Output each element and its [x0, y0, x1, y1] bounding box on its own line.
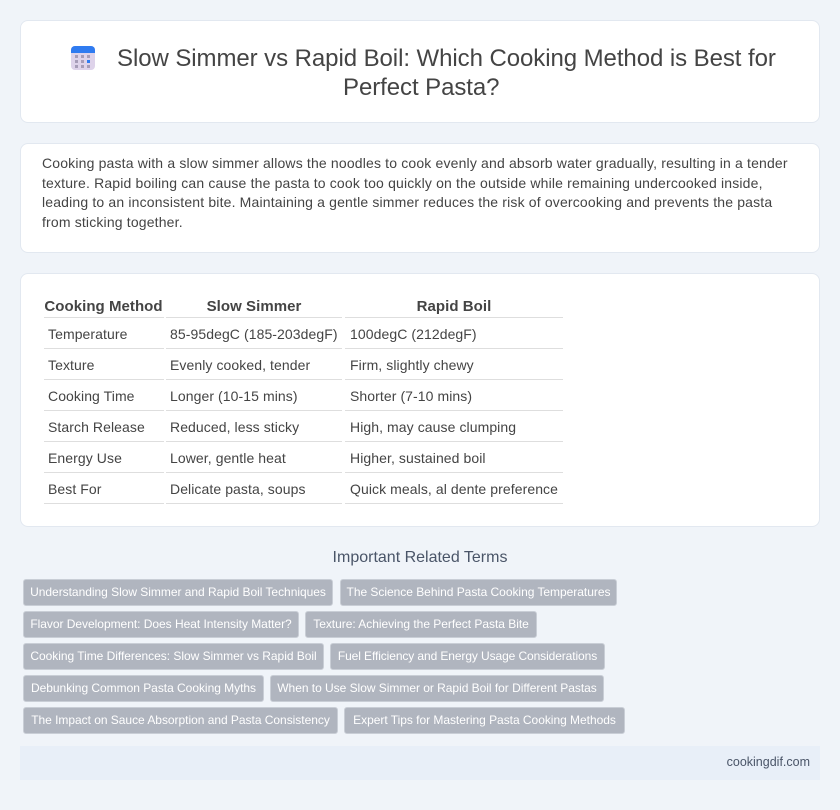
related term tags: The Impact on Sauce Absorption and Pasta Consistency [31, 713, 330, 727]
related term tags: The Science Behind Pasta Cooking Temperatures [347, 585, 610, 599]
row: cooking time: Cooking Time [48, 388, 135, 404]
panel: comparison table: Delicate pasta, soups [170, 481, 306, 497]
panel: title card [20, 20, 820, 123]
panel: comparison table: 85-95degC (185-203degF) [170, 326, 338, 342]
panel: comparison table: Higher, sustained boil [350, 450, 486, 466]
panel: introduction [20, 143, 820, 253]
related term tags: Flavor Development: Does Heat Intensity Matter? [30, 617, 292, 631]
intro text: Cooking pasta with a slow simmer allows the noodles to cook evenly and absorb water gradually, resulting in a tender [42, 155, 788, 171]
row: temperature: Temperature [48, 326, 127, 342]
related term tags: Expert Tips for Mastering Pasta Cooking Methods [353, 713, 616, 727]
related terms heading: Important Related Terms [333, 549, 507, 566]
related term tags [23, 579, 625, 734]
panel: comparison table: 100degC (212degF) [350, 326, 477, 342]
row: energy use: Energy Use [48, 450, 122, 466]
panel: comparison table: Shorter (7-10 mins) [350, 388, 472, 404]
intro text: from sticking together. [42, 214, 183, 230]
panel: comparison table: Evenly cooked, tender [170, 357, 310, 373]
intro text: leading to an inconsistent bite. Maintaining a gentle simmer reduces the risk of overcooking and prevents the pasta [42, 194, 772, 210]
panel: comparison table [20, 273, 820, 527]
table header: Cooking Method [44, 298, 163, 315]
panel: comparison table: Firm, slightly chewy [350, 357, 474, 373]
footer source: cookingdif.com [727, 755, 810, 769]
related term tags: Texture: Achieving the Perfect Pasta Bite [313, 617, 529, 631]
icon: calendar [71, 46, 95, 70]
intro text [42, 155, 788, 230]
row: texture: Texture [48, 357, 94, 373]
related term tags: Understanding Slow Simmer and Rapid Boil Techniques [30, 585, 326, 599]
row: starch release: Starch Release [48, 419, 145, 435]
related term tags: When to Use Slow Simmer or Rapid Boil for Different Pastas [277, 681, 597, 695]
panel: comparison table: Longer (10-15 mins) [170, 388, 298, 404]
related term tags: Cooking Time Differences: Slow Simmer vs Rapid Boil [30, 649, 317, 663]
intro text: texture. Rapid boiling can cause the pasta to cook too quickly on the outside while remaining undercooked inside, [42, 174, 763, 190]
panel: comparison table: Lower, gentle heat [170, 450, 286, 466]
panel: comparison table: Reduced, less sticky [170, 419, 299, 435]
panel: comparison table: High, may cause clumping [350, 419, 516, 435]
title: Slow Simmer vs Rapid Boil: Which Cooking Method is Best for [117, 45, 776, 72]
title [117, 45, 776, 101]
row: best for: Best For [48, 481, 102, 497]
panel: comparison table: Quick meals, al dente preference [350, 481, 558, 497]
panel: comparison table: Slow Simmer [207, 298, 301, 315]
panel: comparison table: Rapid Boil [417, 298, 491, 315]
title: Perfect Pasta? [343, 74, 499, 101]
footer bar [20, 746, 820, 780]
related term tags: Debunking Common Pasta Cooking Myths [31, 681, 256, 695]
related term tags: Fuel Efficiency and Energy Usage Considerations [338, 649, 597, 663]
